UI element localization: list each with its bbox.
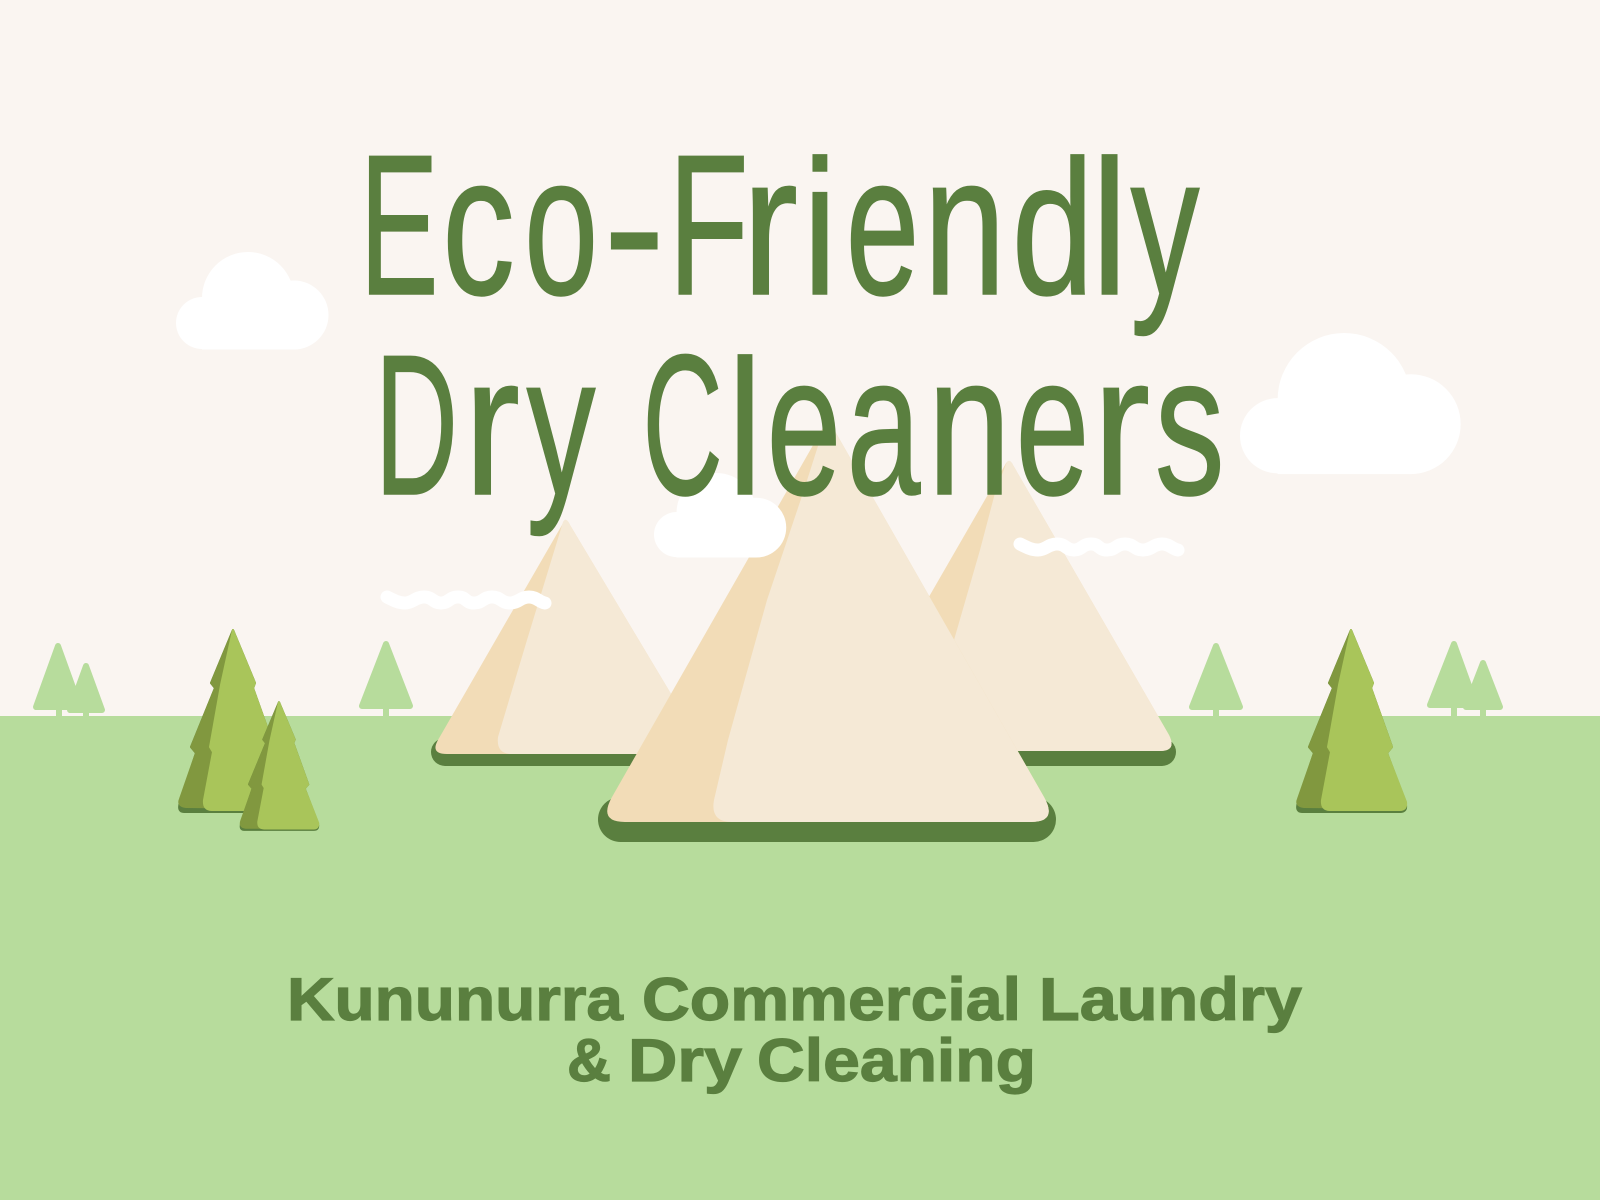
foreground tree: small left — [241, 702, 318, 830]
title — [360, 114, 1225, 537]
title: y — [1130, 114, 1200, 337]
cloud: right — [1240, 333, 1461, 474]
faded background trees: far right pair — [1430, 644, 1500, 716]
faded background trees: far left pair — [36, 646, 102, 716]
title: a — [847, 314, 921, 537]
mountain: central — [598, 421, 1056, 842]
title: F — [668, 114, 749, 337]
title: i — [803, 120, 837, 335]
sky background — [0, 0, 1600, 716]
subtitle: & — [567, 1027, 611, 1094]
title: o — [524, 114, 598, 337]
mountain: left — [431, 520, 707, 766]
title: E — [360, 114, 438, 337]
title: r — [742, 114, 798, 337]
title: - — [603, 114, 665, 337]
title: n — [924, 114, 1006, 337]
title: e — [767, 314, 841, 537]
title: c — [442, 114, 515, 337]
title: l — [728, 320, 762, 535]
wavy mist line: left mountain — [387, 597, 545, 603]
title: n — [928, 314, 1011, 537]
title: e — [1016, 314, 1089, 537]
title: C — [642, 314, 723, 537]
faded background tree: right of mountains — [1192, 646, 1240, 716]
subtitle: Laundry — [1039, 966, 1303, 1033]
title: r — [464, 314, 520, 537]
foreground tree: right — [1297, 630, 1406, 812]
title: D — [375, 314, 458, 537]
ground — [0, 716, 1600, 1200]
title: e — [846, 114, 919, 337]
mountain: right — [840, 461, 1176, 766]
title: r — [1093, 314, 1150, 537]
subtitle: Cleaning — [757, 1027, 1036, 1094]
cloud: upper left — [176, 252, 328, 350]
title: y — [526, 314, 596, 537]
wavy mist line: right mountain — [1020, 544, 1178, 550]
title: l — [1091, 120, 1128, 335]
subtitle: Commercial — [642, 966, 1021, 1033]
subtitle: Dry — [628, 1027, 743, 1094]
foreground tree: large left — [179, 630, 288, 812]
subtitle — [287, 966, 1303, 1094]
faded background tree: left of mountains — [362, 644, 410, 716]
title: d — [1012, 120, 1094, 335]
cloud: centre, in front of mountains — [654, 473, 786, 558]
subtitle: Kununurra — [287, 966, 624, 1033]
title: s — [1155, 314, 1225, 537]
